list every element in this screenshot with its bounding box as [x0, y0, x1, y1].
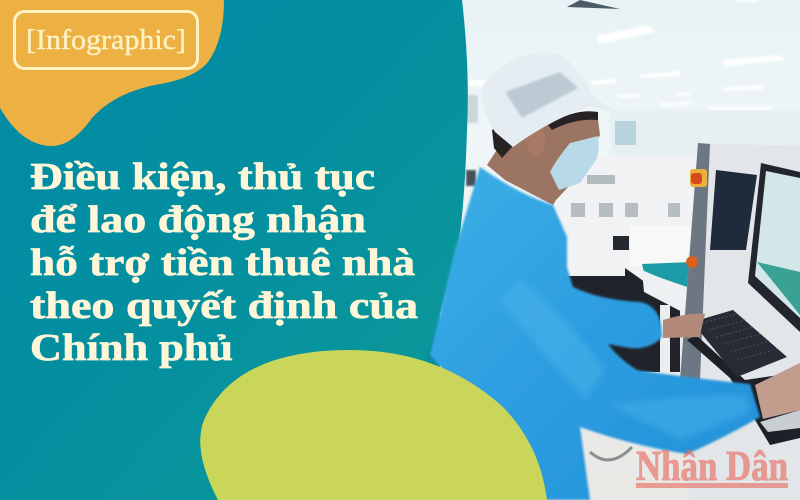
face mask: [550, 136, 599, 190]
photo: factory clean room: [440, 0, 800, 500]
stool: [590, 447, 632, 460]
neck and face: [487, 112, 600, 205]
back wall: [610, 110, 800, 155]
worker: [430, 52, 800, 500]
badge: [Infographic]: [14, 12, 198, 68]
left hand: [663, 314, 705, 338]
keyboard: [692, 310, 787, 377]
badge: [Infographic]: [Infographic]: [26, 25, 186, 56]
ceiling vent: [567, 0, 620, 9]
teal background panel: [0, 0, 468, 500]
right hand: [755, 363, 800, 419]
title: Chính phủ: [30, 327, 233, 369]
machine console: [680, 143, 800, 500]
orange blob: [0, 0, 224, 146]
hair: [492, 128, 512, 158]
coat: [430, 167, 760, 500]
title: hỗ trợ tiền thuê nhà: [30, 242, 415, 284]
monitor: [748, 163, 800, 332]
keyboard tray: [687, 335, 800, 445]
white machine behind worker: [550, 156, 700, 278]
title: theo quyết định của: [30, 285, 418, 327]
left machinery behind worker: [466, 95, 478, 123]
teal side table: [642, 262, 692, 288]
dark gap under machine: [568, 268, 680, 372]
title: để lao động nhận: [30, 199, 366, 241]
head cap: [481, 52, 617, 147]
title: [30, 156, 418, 369]
ceiling lights: [465, 0, 786, 114]
sleeve highlights: [500, 280, 605, 400]
ear: [527, 124, 545, 156]
lime blob: [200, 350, 547, 500]
title: Điều kiện, thủ tục: [30, 156, 375, 198]
